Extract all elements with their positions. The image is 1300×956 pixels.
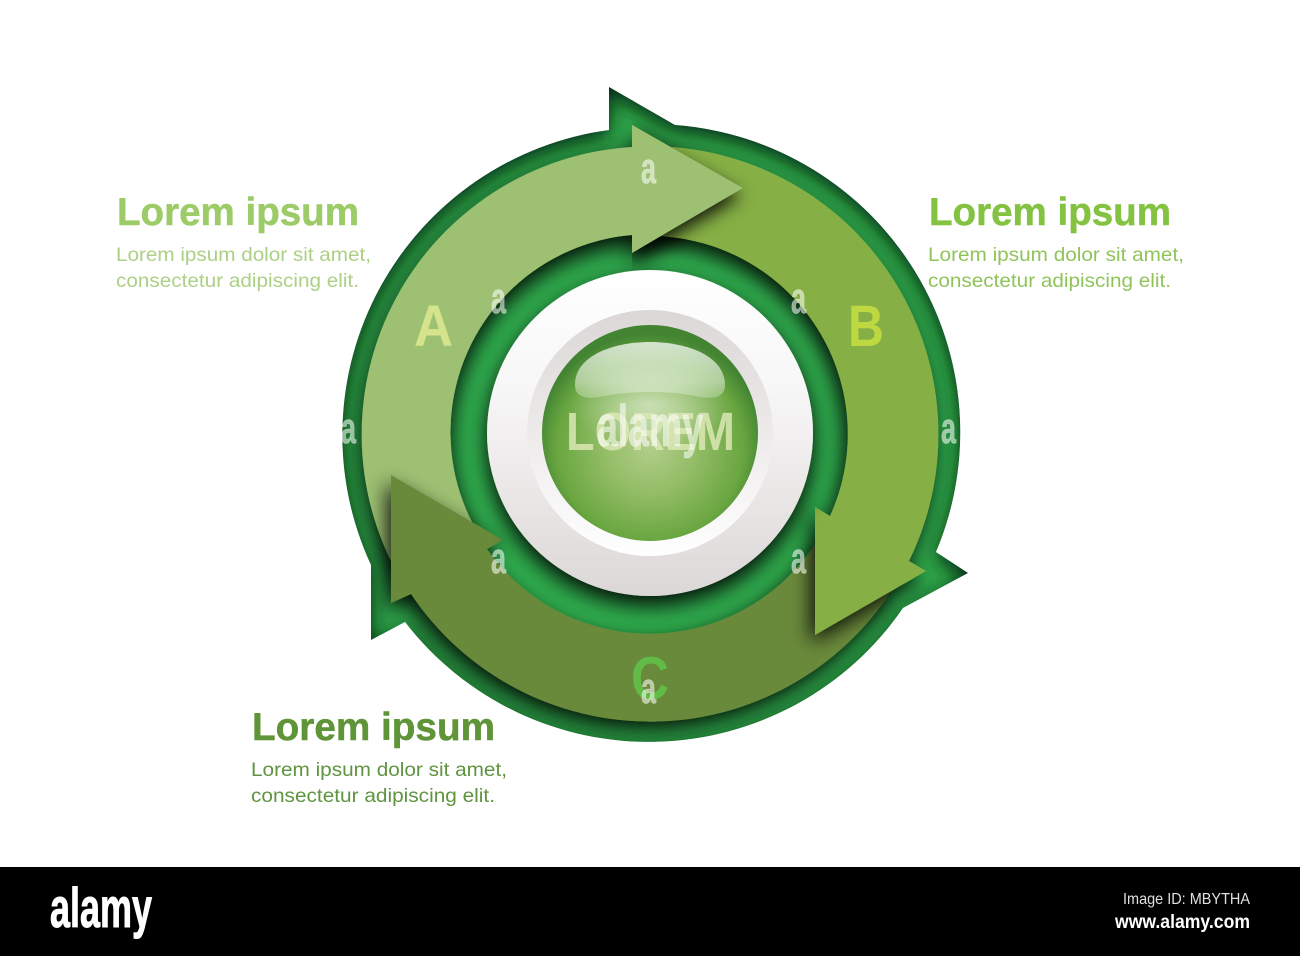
arrow C band: [391, 475, 892, 722]
body A: consectetur adipiscing elit.: [116, 270, 359, 292]
body A: Lorem ipsum dolor sit amet,: [116, 244, 371, 266]
heading B: Lorem ipsum: [929, 191, 1171, 234]
watermark letters: alamy: [597, 394, 703, 459]
central green ball: [542, 325, 758, 541]
watermark letters: [341, 144, 956, 713]
footer bar: [0, 867, 1300, 956]
ball gloss highlight: [575, 342, 725, 398]
watermark letters: a: [491, 534, 506, 583]
letter C: C: [631, 645, 669, 712]
heading C: Lorem ipsum: [252, 706, 495, 749]
body B: Lorem ipsum dolor sit amet,: [928, 244, 1184, 266]
watermark letters: a: [641, 664, 656, 713]
text block B: [928, 191, 1184, 292]
watermark letters: a: [491, 274, 506, 323]
footer logo: alamy: [50, 876, 152, 939]
watermark letters: a: [641, 144, 656, 193]
text block C: [251, 706, 507, 807]
letter A: A: [414, 294, 453, 359]
cycle diagram: [342, 87, 968, 742]
watermark letters: a: [791, 534, 806, 583]
text block A: [116, 191, 371, 292]
image id: Image ID: MBYTHA: [1123, 891, 1250, 908]
website: www.alamy.com: [1114, 912, 1250, 933]
heading A: Lorem ipsum: [117, 191, 359, 234]
arrow B band: [655, 147, 938, 635]
arrow A head: [632, 125, 743, 253]
watermark letters: a: [791, 274, 806, 323]
outer cut-out ring with arrow tips: [342, 87, 968, 742]
arrow A head shadow: [630, 133, 741, 261]
three arrow bands: [362, 125, 938, 722]
body C: consectetur adipiscing elit.: [251, 785, 495, 807]
watermark letters: a: [941, 404, 956, 453]
body B: consectetur adipiscing elit.: [928, 270, 1171, 292]
letter B: B: [848, 294, 884, 359]
watermark letters: a: [341, 404, 356, 453]
gray inner ring: [527, 310, 773, 556]
center label: LOREM: [566, 402, 735, 462]
arrow A band: [362, 125, 743, 578]
white ring: [487, 270, 813, 596]
ball inner glow: [570, 363, 730, 447]
body C: Lorem ipsum dolor sit amet,: [251, 759, 507, 781]
